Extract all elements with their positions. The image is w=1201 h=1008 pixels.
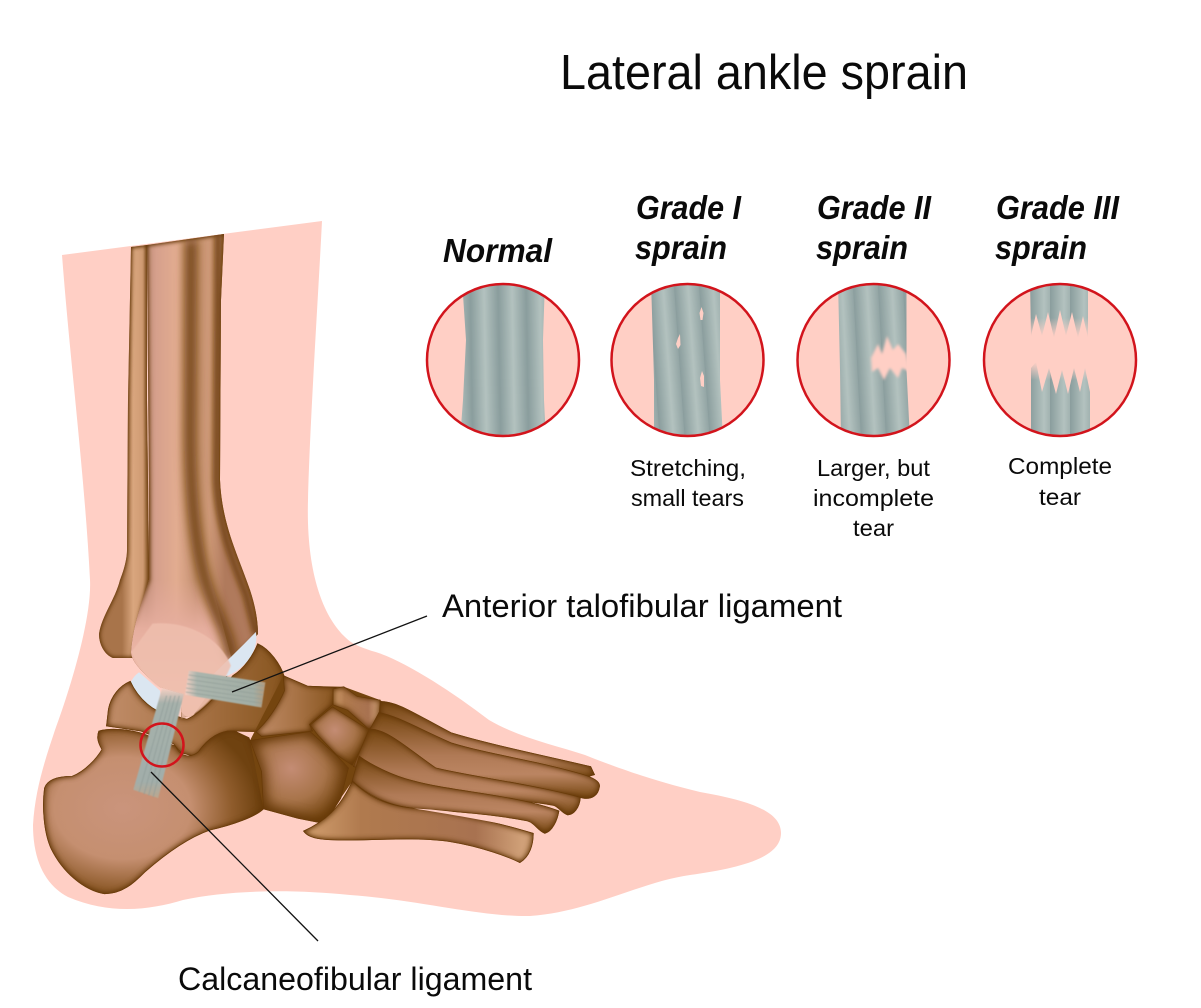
metatarsal 4 (352, 756, 559, 833)
gap between metatarsals (414, 809, 531, 830)
caption: grade II: Larger, but (817, 455, 931, 481)
circle: grade I ligament (612, 280, 764, 440)
skin silhouette (33, 221, 781, 916)
circle: grade II ligament (798, 280, 950, 440)
navicular (256, 676, 336, 736)
caption: grade III: tear (1039, 484, 1081, 510)
heading: grade II: Grade II (817, 189, 932, 226)
circle: grade III ligament (984, 280, 1136, 440)
heading: grade III: Grade III (996, 189, 1120, 226)
label: calcaneofibular ligament: Calcaneofibular ligament (178, 961, 532, 997)
caption: grade I: small tears (631, 485, 744, 511)
heading: grade I: Grade I (636, 189, 742, 226)
foot illustration (33, 221, 781, 941)
fibula with lateral malleolus (99, 245, 149, 658)
cartilage right (214, 632, 256, 677)
red highlight circle (140, 724, 184, 766)
tibia overlap to cover talus (131, 623, 231, 718)
panel: normal (427, 232, 579, 440)
talus body (107, 644, 284, 756)
foot bones (43, 623, 600, 894)
heading: sprain: sprain (816, 229, 908, 266)
metatarsal 2 (369, 713, 600, 798)
heading: sprain: sprain (995, 229, 1087, 266)
metatarsal 1 (380, 701, 594, 778)
metatarsal 3 (353, 729, 580, 815)
leader line: calcaneofibular (151, 772, 318, 941)
midfoot backing (250, 676, 436, 824)
anterior talofibular ligament (185, 671, 265, 708)
calcaneofibular ligament (133, 688, 184, 798)
metatarsal 5 (304, 781, 533, 863)
tibia dark ridge (190, 240, 232, 660)
heading: normal: Normal (443, 232, 553, 269)
circle: normal ligament (427, 280, 579, 440)
leader line: anterior talofibular (232, 616, 427, 692)
title: Lateral ankle sprain (560, 46, 968, 100)
label: anterior talofibular ligament: Anterior talofibular ligament (442, 588, 842, 624)
panel: grade I (612, 189, 764, 511)
caption: grade II: incomplete (813, 485, 934, 511)
caption: grade II: tear (853, 515, 894, 541)
caption: grade III: Complete (1008, 453, 1112, 479)
cuneiform middle (310, 707, 369, 765)
cuboid (250, 732, 348, 824)
caption: grade I: Stretching, (630, 455, 746, 481)
calcaneus (43, 729, 263, 894)
tear fade (1026, 318, 1094, 380)
cartilage left (129, 672, 162, 713)
cuneiform upper (333, 687, 380, 729)
tibia pink lower face (131, 584, 231, 717)
panel: grade III (984, 189, 1136, 510)
heading: sprain: sprain (635, 229, 727, 266)
tibia (125, 234, 258, 720)
panel: grade II (798, 189, 950, 541)
